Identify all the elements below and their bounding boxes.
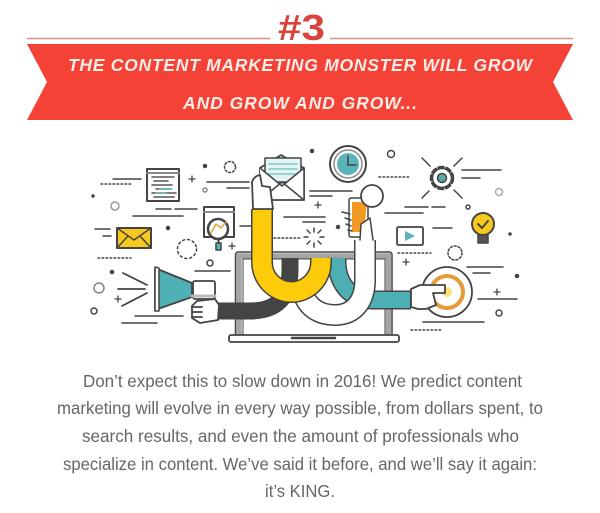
icon: clock: [330, 146, 366, 182]
hand holding envelope: [252, 175, 273, 209]
envelope in hand: [260, 155, 304, 200]
white arm: [304, 240, 365, 315]
banner: [27, 44, 573, 120]
heading number: #3: [278, 7, 325, 48]
icon: code window: [147, 169, 179, 201]
body paragraph: marketing will evolve in every way possible, from dollars spent, to: [57, 398, 543, 418]
icon: analytics magnifier: [204, 207, 234, 250]
banner: THE CONTENT MARKETING MONSTER WILL GROW: [68, 55, 533, 75]
dark arm: [218, 258, 290, 311]
icon: video player: [397, 227, 423, 245]
right hand pointing: [411, 285, 445, 309]
body paragraph: [57, 371, 543, 501]
body paragraph: Don’t expect this to slow down in 2016! We predict content: [83, 371, 522, 391]
background lines and dots: [91, 150, 518, 330]
laptop: [229, 252, 399, 342]
body paragraph: it’s KING.: [265, 481, 335, 501]
icon: light bulb: [472, 213, 494, 243]
icon: gear: [422, 158, 462, 198]
body paragraph: specialize in content. We’ve said it before, and we’ll say it again:: [63, 454, 537, 474]
illustration: [91, 146, 518, 342]
icon: yellow envelope: [117, 228, 151, 248]
target: [422, 267, 472, 317]
megaphone and left hand: [118, 267, 219, 323]
banner: AND GROW AND GROW...: [182, 93, 417, 113]
phone hand: [342, 185, 383, 240]
yellow arm: [262, 209, 321, 292]
teal arm: [337, 258, 411, 300]
icon: sparkle burst: [304, 228, 324, 247]
body paragraph: search results, and even the amount of professionals who: [82, 426, 519, 446]
